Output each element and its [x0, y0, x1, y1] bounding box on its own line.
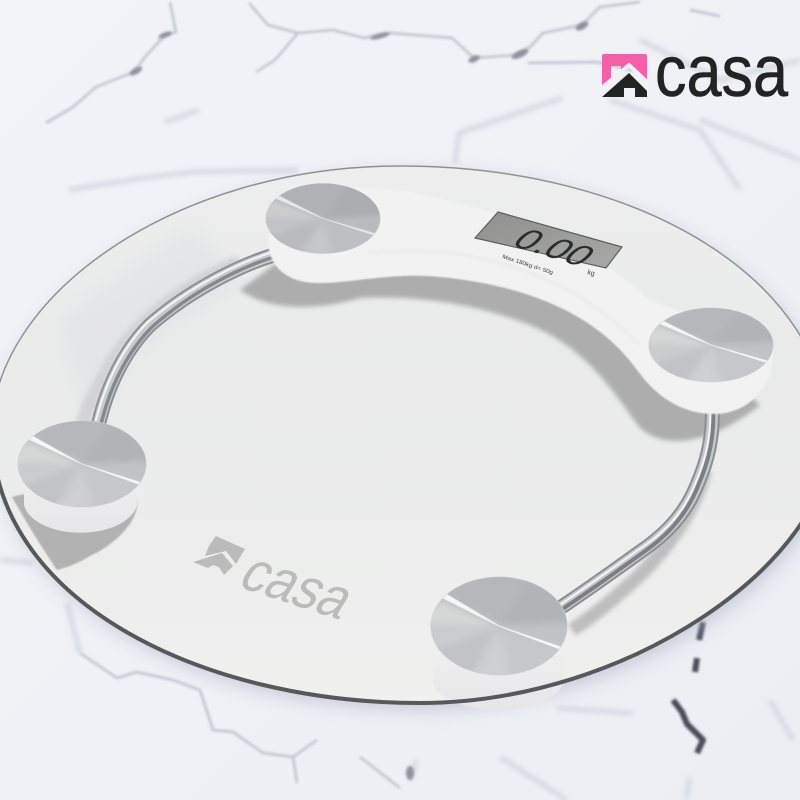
- shadow under display bar: [240, 260, 760, 441]
- glass plate: [0, 166, 800, 703]
- printed logo on glass: [193, 536, 367, 631]
- shadow of bottom-right tube: [572, 470, 705, 630]
- left tube: [96, 251, 277, 424]
- display bar side crease: [367, 251, 640, 345]
- scale shadow on marble: [0, 173, 800, 710]
- dark veins lower right: [673, 622, 703, 753]
- shadow of left foot: [12, 492, 137, 570]
- printed logo word: casa: [229, 541, 367, 631]
- right tube: [561, 402, 713, 608]
- glass thick lower rim: [0, 430, 800, 703]
- foot pad: left: [0, 408, 178, 533]
- logo icon: pink square with house: [602, 54, 647, 97]
- foot pad: top left: [249, 173, 408, 264]
- LCD reading: 0.00: [504, 224, 603, 272]
- Casa brand logo: [602, 32, 789, 112]
- soft reflection on glass: [60, 225, 250, 430]
- white display bar: [268, 187, 773, 414]
- LCD unit: kg: [586, 269, 596, 278]
- capacity label: Max 180kg d= 50g: [501, 254, 554, 276]
- LCD display: [475, 212, 622, 278]
- foot pad: right: [630, 297, 800, 393]
- shadow of left tube: [82, 262, 240, 425]
- foot pad: bottom: [411, 562, 601, 710]
- printed logo icon: [193, 536, 245, 575]
